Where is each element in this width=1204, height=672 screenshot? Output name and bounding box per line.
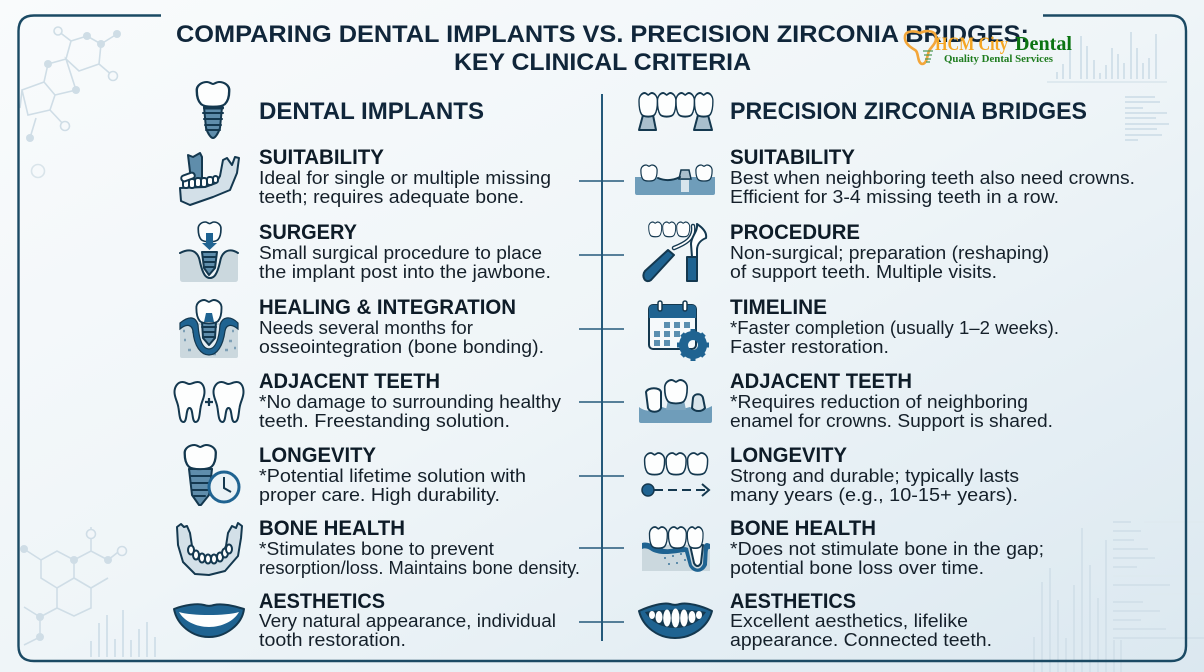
text: aesthetics <box>730 590 992 650</box>
logo: HCM City Dental: HCM City <box>935 34 1008 55</box>
icon: implant <box>197 82 229 138</box>
row: longevity <box>185 444 526 505</box>
icon: osseointegration <box>180 300 238 358</box>
text: adjacent teeth <box>730 370 1053 431</box>
text: longevity: LONGEVITY <box>730 444 847 467</box>
text: bone health: potential bone loss over time. <box>730 557 984 578</box>
decorative molecule bottom left <box>20 527 126 645</box>
text: suitability: SUITABILITY <box>259 146 384 169</box>
row: suitability <box>635 146 1135 207</box>
text: procedure: Non-surgical; preparation (reshaping) <box>730 242 1049 263</box>
logo: HCM City Dental: Quality Dental Services <box>944 54 1053 65</box>
icon: two healthy teeth <box>174 382 244 422</box>
text: procedure: of support teeth. Multiple visits. <box>730 261 997 282</box>
panel: dental implants <box>174 82 580 650</box>
text: surgery: the implant post into the jawbone. <box>259 261 551 282</box>
text: aesthetics: tooth restoration. <box>259 629 406 650</box>
text: suitability: Ideal for single or multiple missing <box>259 167 551 188</box>
text: timeline: Faster restoration. <box>730 336 889 357</box>
text: suitability: Best when neighboring teeth also need crowns. <box>730 167 1135 188</box>
icon: smile with teeth <box>639 603 712 638</box>
text: bone health: BONE HEALTH <box>730 517 876 540</box>
text: longevity: many years (e.g., 10-15+ years). <box>730 484 1018 505</box>
icon: implant placement <box>180 222 238 282</box>
text: aesthetics: Excellent aesthetics, lifelike <box>730 610 968 631</box>
text: aesthetics: AESTHETICS <box>259 590 385 613</box>
title: COMPARING DENTAL IMPLANTS VS. PRECISION ZIRCONIA BRIDGES: <box>176 21 1029 48</box>
text: timeline <box>730 296 1059 357</box>
text: surgery <box>259 221 551 282</box>
text: suitability <box>259 146 551 207</box>
text: healing and integration: HEALING & INTEGRATION <box>259 296 516 319</box>
text: bone health <box>730 517 1044 578</box>
text: adjacent teeth: enamel for crowns. Support is shared. <box>730 410 1053 431</box>
text: healing and integration: osseointegration (bone bonding). <box>259 336 544 357</box>
text: bone health: BONE HEALTH <box>259 517 405 540</box>
text: adjacent teeth: ADJACENT TEETH <box>730 370 912 393</box>
text: suitability <box>730 146 1135 207</box>
text: bone health: *Stimulates bone to prevent <box>259 538 495 559</box>
panel: precision zirconia bridges <box>635 93 1135 650</box>
row: healing and integration <box>180 296 544 358</box>
text: aesthetics: AESTHETICS <box>730 590 856 613</box>
text: longevity: *Potential lifetime solution with <box>259 465 526 486</box>
text: surgery: SURGERY <box>259 221 357 244</box>
text: adjacent teeth <box>259 370 562 431</box>
icon: gap with crown preparation <box>635 165 715 195</box>
icon: healthy jaw <box>177 523 242 575</box>
decorative chart and lines bottom right <box>1034 522 1204 672</box>
text: adjacent teeth: *Requires reduction of neighboring <box>730 391 1028 412</box>
row: surgery <box>180 221 551 282</box>
text: longevity <box>730 444 1019 505</box>
column heading: dental implants: DENTAL IMPLANTS <box>259 98 484 125</box>
row: aesthetics <box>174 590 556 650</box>
text: adjacent teeth: ADJACENT TEETH <box>259 370 440 393</box>
text: suitability: Efficient for 3-4 missing teeth in a row. <box>730 186 1059 207</box>
row: adjacent teeth <box>174 370 562 431</box>
row: bone health <box>642 517 1044 578</box>
text: suitability: teeth; requires adequate bone. <box>259 186 524 207</box>
icon: implant with clock <box>185 445 239 505</box>
text: aesthetics: Very natural appearance, individual <box>259 610 556 631</box>
text: timeline: *Faster completion (usually 1–2 weeks). <box>730 317 1059 338</box>
text: suitability: SUITABILITY <box>730 146 855 169</box>
icon: bone loss under gap <box>642 527 710 572</box>
decorative bars top right <box>1047 32 1169 140</box>
logo: HCM City Dental: Dental <box>1015 33 1072 55</box>
decorative molecule top left <box>20 27 121 178</box>
row: procedure <box>643 221 1049 282</box>
text: timeline: TIMELINE <box>730 296 827 319</box>
text: bone health: resorption/loss. Maintains bone density. <box>259 557 580 578</box>
text: adjacent teeth: *No damage to surrounding healthy <box>259 391 562 412</box>
text: adjacent teeth: teeth. Freestanding solution. <box>259 410 510 431</box>
title: KEY CLINICAL CRITERIA <box>454 49 751 76</box>
icon: bridge <box>639 93 713 130</box>
text: healing and integration: Needs several months for <box>259 317 473 338</box>
row: timeline <box>649 296 1059 361</box>
icon: bridge with timeline arrow <box>642 453 709 496</box>
center divider with connectors <box>579 94 624 641</box>
text: aesthetics <box>259 590 556 650</box>
icon: jawbone <box>180 153 239 205</box>
column heading: precision zirconia bridges: PRECISION ZIRCONIA BRIDGES <box>730 98 1087 125</box>
text: bone health <box>259 517 580 578</box>
icon: dental tools <box>643 222 706 281</box>
title <box>176 21 1029 76</box>
text: healing and integration <box>259 296 544 357</box>
row: bone health <box>177 517 580 578</box>
text: longevity <box>259 444 526 505</box>
text: bone health: *Does not stimulate bone in the gap; <box>730 538 1044 559</box>
text: aesthetics: appearance. Connected teeth. <box>730 629 992 650</box>
row: aesthetics <box>639 590 992 650</box>
decorative bars bottom left <box>91 610 155 657</box>
row: adjacent teeth <box>639 370 1053 431</box>
row: longevity <box>642 444 1019 505</box>
text: longevity: LONGEVITY <box>259 444 376 467</box>
icon: prepared neighboring teeth <box>639 380 712 423</box>
row: suitability <box>180 146 551 207</box>
text: procedure: PROCEDURE <box>730 221 860 244</box>
icon: smile <box>174 604 244 637</box>
text: longevity: Strong and durable; typically lasts <box>730 465 1019 486</box>
logo: HCM City Dental <box>905 31 1072 65</box>
text: surgery: Small surgical procedure to place <box>259 242 542 263</box>
icon: calendar with gear <box>649 301 709 361</box>
text: longevity: proper care. High durability. <box>259 484 500 505</box>
text: procedure <box>730 221 1049 282</box>
